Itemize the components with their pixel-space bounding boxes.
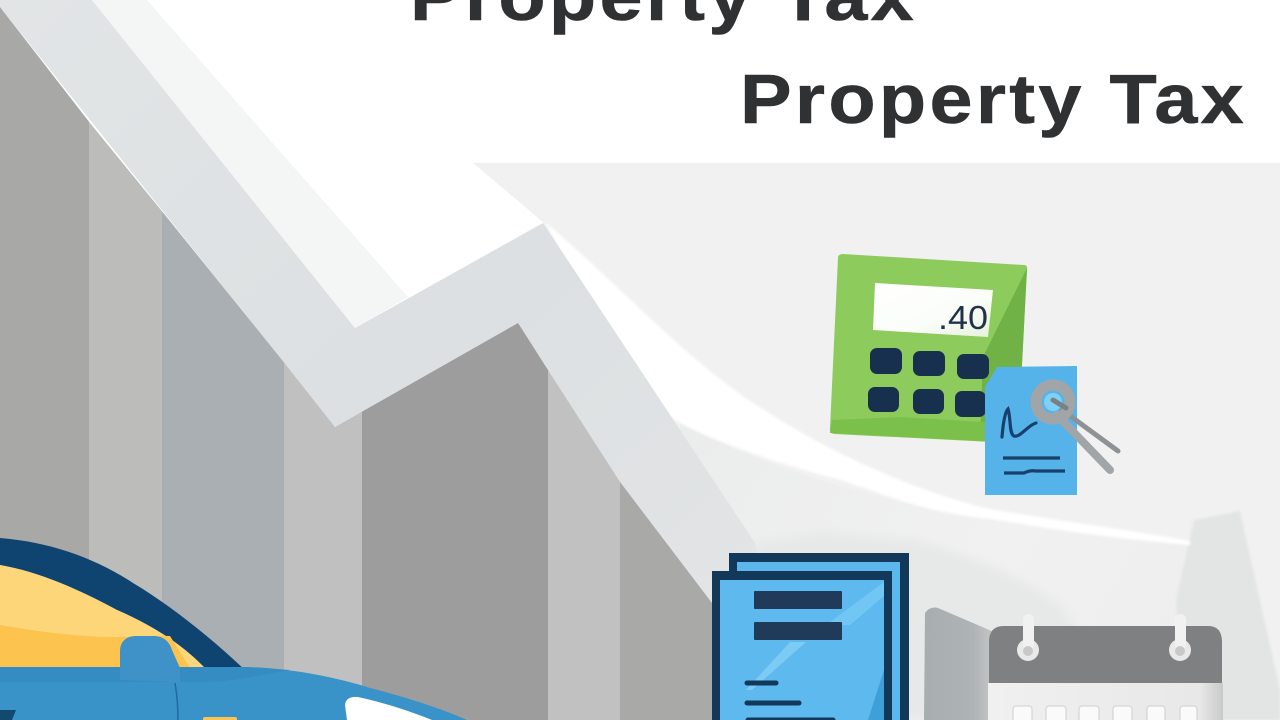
note lines: [1003, 458, 1065, 473]
band highlight strip: [92, 0, 408, 328]
grey block behind calendar: [924, 608, 994, 720]
calendar day cells: [1013, 706, 1197, 720]
car door line: [175, 683, 178, 720]
grey bar chart: [0, 0, 740, 720]
icon: stacked documents: [712, 553, 909, 720]
title: Property Tax: Property Tax: [740, 60, 1247, 138]
keys: [1062, 410, 1118, 451]
calculator screen: [873, 283, 993, 337]
icon: signed note with keys: [985, 366, 1118, 495]
car body: [0, 667, 467, 720]
car door handle: [0, 710, 16, 720]
document heading bars: [754, 591, 842, 609]
icon: calculator: [830, 254, 1027, 443]
light background panel: [473, 163, 1280, 720]
white curved swoosh: [545, 222, 1190, 545]
calculator readout: .40: [938, 299, 988, 336]
calendar rings: [1017, 614, 1191, 661]
calculator keys: [868, 348, 989, 417]
signature: [1002, 409, 1036, 437]
icon: calendar: [988, 614, 1223, 720]
declining trend band: [0, 0, 800, 720]
document text lines: [747, 683, 833, 720]
lower background shapes: [680, 423, 1280, 720]
key ring: [1044, 393, 1062, 411]
car mirror: [120, 636, 180, 682]
car headlight: [345, 697, 432, 720]
car roof: [0, 538, 245, 670]
car indicator: [203, 717, 237, 720]
car window: [0, 565, 205, 668]
illustration: car: [0, 538, 467, 720]
